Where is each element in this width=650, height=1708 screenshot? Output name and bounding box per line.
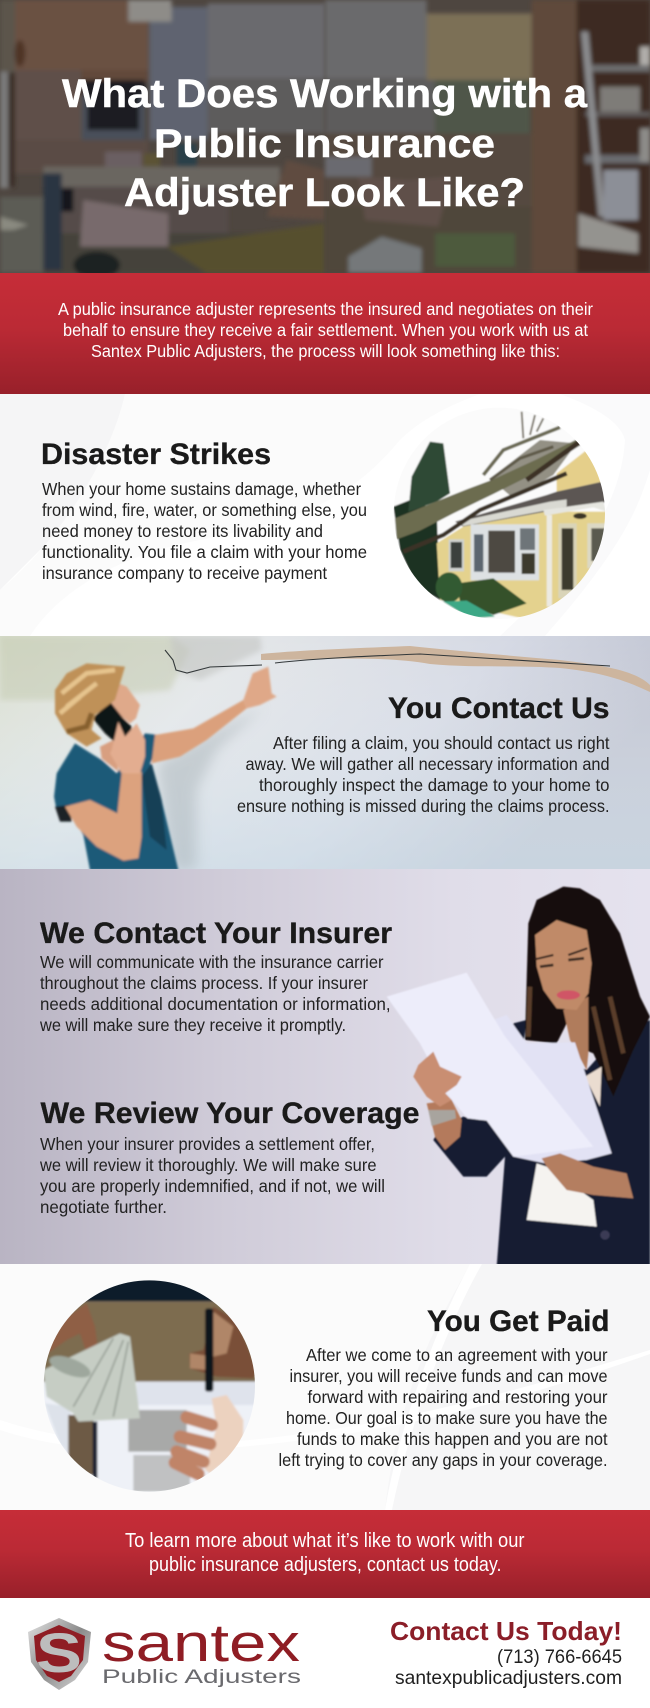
closing text: To learn more about what it’s like to work with our — [125, 1530, 525, 1552]
body text: needs additional documentation or information, — [40, 994, 390, 1014]
body text: When your home sustains damage, whether — [42, 479, 361, 499]
body text — [39, 1134, 385, 1217]
icon: shield — [28, 1618, 91, 1690]
body text: insurer, you will receive funds and can move — [290, 1366, 608, 1386]
intro text — [58, 299, 593, 361]
body text: functionality. You file a claim with your home — [42, 542, 367, 562]
website: santexpublicadjusters.com — [395, 1667, 622, 1689]
panel: you get paid — [0, 1264, 650, 1510]
panel: insurer and coverage — [0, 869, 650, 1267]
title: What Does Working with a — [62, 72, 588, 116]
heading: You Contact Us — [388, 692, 610, 725]
logo tagline: Public Adjusters — [102, 1666, 301, 1688]
body text: We will communicate with the insurance carrier — [40, 952, 384, 972]
icon: shield: S — [36, 1621, 82, 1684]
intro text: A public insurance adjuster represents the insured and negotiates on their — [58, 299, 593, 319]
intro text: Santex Public Adjusters, the process will look something like this: — [91, 341, 560, 361]
title: Public Insurance — [154, 122, 495, 166]
body text: After filing a claim, you should contact us right — [273, 733, 610, 753]
closing text: public insurance adjusters, contact us today. — [149, 1554, 502, 1576]
body text: home. Our goal is to make sure you have the — [286, 1408, 608, 1428]
body text: we will review it thoroughly. We will make sure — [39, 1155, 377, 1175]
title — [62, 72, 588, 215]
heading: Disaster Strikes — [41, 438, 271, 471]
body text: throughout the claims process. If your insurer — [40, 973, 368, 993]
panel: intro banner — [0, 273, 650, 394]
body text: insurance company to receive payment — [42, 563, 327, 583]
body text: away. We will gather all necessary information and — [246, 754, 610, 774]
body text: After we come to an agreement with your — [306, 1345, 608, 1365]
body text: thoroughly inspect the damage to your home to — [259, 775, 610, 795]
phone: (713) 766-6645 — [497, 1646, 622, 1668]
body text — [237, 733, 610, 816]
woman on phone — [54, 663, 277, 870]
contact heading: Contact Us Today! — [390, 1616, 622, 1646]
woman with papers — [387, 887, 650, 1267]
heading: We Review Your Coverage — [40, 1097, 419, 1130]
body text: left trying to cover any gaps in your coverage. — [278, 1450, 608, 1470]
panel: disaster strikes — [0, 394, 605, 618]
footer contact — [390, 1616, 622, 1689]
body text: from wind, fire, water, or something else, you — [42, 500, 367, 520]
body text: funds to make this happen and you are not — [297, 1429, 608, 1449]
body text: ensure nothing is missed during the claims process. — [237, 796, 610, 816]
body text — [42, 479, 367, 583]
title: Adjuster Look Like? — [124, 171, 525, 215]
body text — [278, 1345, 608, 1470]
body text — [39, 952, 390, 1035]
panel: you contact us — [0, 636, 650, 870]
logo name: santex — [102, 1614, 300, 1673]
heading: You Get Paid — [427, 1305, 610, 1338]
photo: tree fallen on house — [394, 410, 605, 618]
wall crack — [0, 636, 650, 700]
panel: closing banner — [0, 1510, 650, 1598]
closing text — [125, 1530, 525, 1576]
body text: negotiate further. — [40, 1197, 167, 1217]
body text: you are properly indemnified, and if not, we will — [40, 1176, 385, 1196]
body text: need money to restore its livability and — [42, 521, 323, 541]
intro text: behalf to ensure they receive a fair settlement. When you work with us at — [63, 320, 588, 340]
heading: We Contact Your Insurer — [40, 917, 392, 950]
body text: When your insurer provides a settlement offer, — [40, 1134, 375, 1154]
footer logo — [28, 1614, 301, 1690]
body text: forward with repairing and restoring your — [308, 1387, 608, 1407]
hero photo: flooded room — [0, 0, 650, 278]
photo: cash and contract — [44, 1280, 255, 1492]
body text: we will make sure they receive it promptly. — [39, 1015, 346, 1035]
